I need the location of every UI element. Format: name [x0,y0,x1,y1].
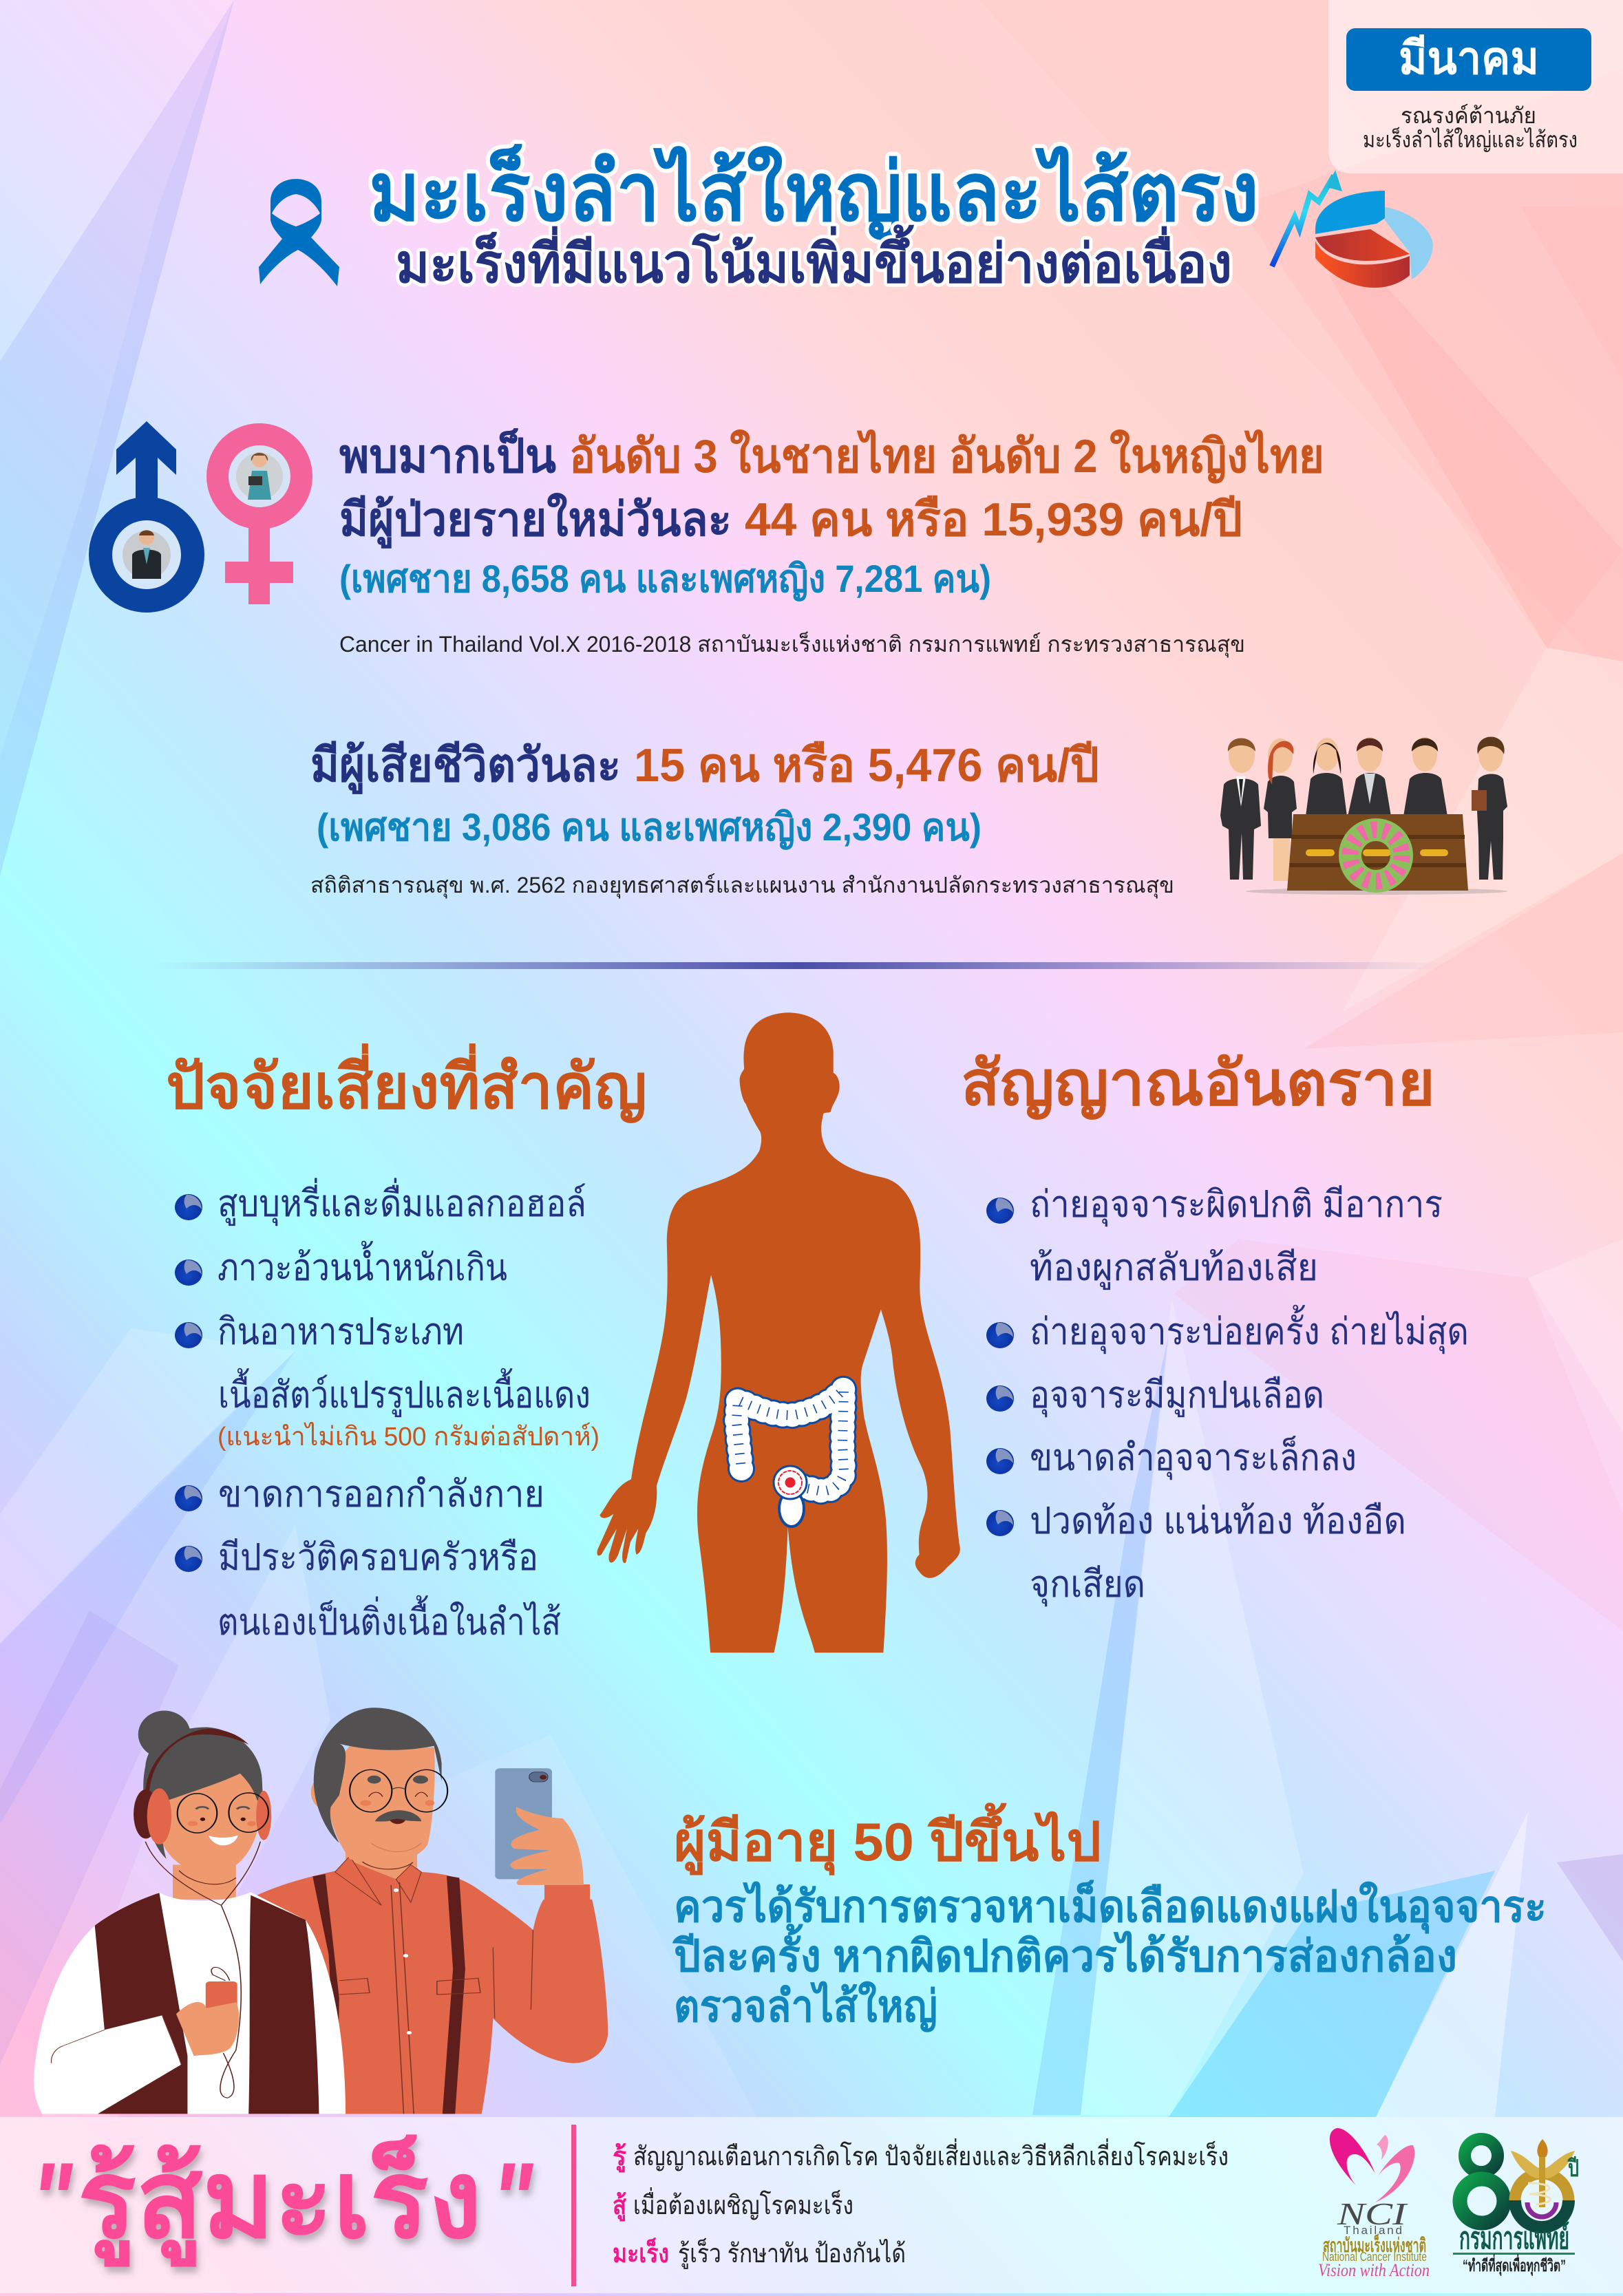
risk factor bullet list: ตนเองเป็นติ่งเนื้อในลำไส้ [218,1595,561,1643]
heading: warning signs: สัญญาณอันตราย [961,1050,1435,1120]
logo: department of medical services 80 years [1453,2139,1579,2277]
warning signs bullet list [986,1184,1469,1607]
logo: national cancer institute: National Cancer Institute [1322,2250,1427,2264]
text block: mortality statistics: สถิติสาธารณสุข พ.ศ. 2562 กองยุทธศาสตร์และแผนงาน สำนักงานปลัดกระทรวงสาธารณสุข [310,873,1174,899]
text block: incidence statistics: มีผู้ป่วยรายใหม่วันละ [339,492,732,549]
warning signs bullet list: ขนาดลำอุจจาระเล็กลง [1030,1436,1357,1480]
slogan explanation: สัญญาณเตือนการเกิดโรค ปัจจัยเสี่ยงและวิธีหลีกเลี่ยงโรคมะเร็ง [633,2138,1229,2171]
icon: mourners around coffin [1220,736,1507,895]
risk factor bullet list: ขาดการออกกำลังกาย [218,1474,544,1515]
risk factor bullet list: (แนะนำไม่เกิน 500 กรัมต่อสัปดาห์) [218,1422,600,1452]
title [369,143,1259,294]
risk factor bullet list: สูบบุหรี่และดื่มแอลกอฮอล์ [218,1178,586,1226]
woman [34,1710,346,2114]
colon [736,1389,844,1527]
text block: mortality statistics: มีผู้เสียชีวิตวันละ [310,739,621,795]
icon: female symbol [206,423,312,604]
text block: mortality statistics: (เพศชาย 3,086 คน และเพศหญิง 2,390 คน) [317,805,982,850]
text block: incidence statistics: 44 คน หรือ 15,939 คน/ปี [745,493,1242,546]
text block: screening advice for age 50+: ปีละครั้ง หากผิดปกติควรได้รับการส่องกล้อง [672,1924,1457,1981]
text block: mortality statistics [310,739,1174,899]
title: มะเร็งลำไส้ใหญ่และไส้ตรง [369,143,1259,240]
warning signs bullet list: ถ่ายอุจจาระผิดปกติ มีอาการ [1030,1184,1443,1227]
risk factor bullet list: เนื้อสัตว์แปรรูปและเนื้อแดง [218,1368,591,1417]
heading: risk factors: ปัจจัยเสี่ยงที่สำคัญ [166,1043,647,1124]
body silhouette with colon [597,1012,960,1652]
text block: screening advice for age 50+: ตรวจลำไส้ใหญ่ [674,1981,937,2032]
text block: mortality statistics: 15 คน หรือ 5,476 คน/ปี [634,739,1099,791]
campaign caption: มะเร็งลำไส้ใหญ่และไส้ตรง [1363,127,1578,152]
slogan explanation: สู้ [613,2191,627,2222]
campaign caption: รณรงค์ต้านภัย [1401,103,1536,128]
text block: screening advice for age 50+: ควรได้รับการตรวจหาเม็ดเลือดแดงแฝงในอุจจาระ [674,1880,1547,1934]
logo: department of medical services 80 years: ปี [1567,2156,1579,2182]
icon: rising arrow and pie chart [1272,170,1433,288]
panel: warning signs [961,1050,1469,1607]
logo: national cancer institute: Vision with Action [1318,2260,1430,2280]
subtitle: มะเร็งที่มีแนวโน้มเพิ่มขึ้นอย่างต่อเนื่อง [396,224,1232,294]
risk factor bullet list [175,1178,600,1643]
silhouette [597,1012,960,1652]
campaign slogan: รู้สู้มะเร็ง [78,2134,482,2267]
text block: incidence statistics: (เพศชาย 8,658 คน และเพศหญิง 7,281 คน) [339,557,991,602]
slogan explanation: รู้ [613,2143,627,2173]
month badge [1346,28,1591,91]
logo: national cancer institute: สถาบันมะเร็งแห่งชาติ [1323,2233,1426,2256]
text block: screening advice for age 50+: ผู้มีอายุ 50 ปีขึ้นไป [674,1803,1101,1875]
risk factor bullet list: กินอาหารประเภท [218,1311,464,1352]
icon: male symbol [89,421,204,613]
illustration: elderly couple [34,1708,608,2114]
divider [151,962,1445,969]
icon: blue ribbon [259,179,339,286]
warning signs bullet list: ปวดท้อง แน่นท้อง ท้องอืด [1030,1500,1406,1542]
slogan explanation: รู้เร็ว รักษาทัน ป้องกันได้ [678,2237,906,2269]
risk factor bullet list: มีประวัติครอบครัวหรือ [218,1537,538,1578]
warning signs bullet list: ท้องผูกสลับท้องเสีย [1030,1247,1318,1290]
text block: incidence statistics: พบมากเป็น [339,428,556,482]
slogan explanation: มะเร็ง [613,2237,669,2268]
slogan explanation [613,2138,1229,2269]
campaign slogan: " [31,2140,74,2260]
man [257,1708,608,2114]
warning signs bullet list: ถ่ายอุจจาระบ่อยครั้ง ถ่ายไม่สุด [1030,1305,1469,1354]
campaign caption [1363,103,1578,152]
campaign slogan: " [491,2140,534,2260]
logo: national cancer institute: Thailand [1344,2224,1402,2237]
logo: department of medical services 80 years: “ทำดีที่สุดเพื่อทุกชีวิต” [1463,2253,1566,2277]
text block: screening advice for age 50+ [672,1803,1547,2032]
slogan explanation: เมื่อต้องเผชิญโรคมะเร็ง [633,2187,853,2220]
text block: incidence statistics: Cancer in Thailand Vol.X 2016-2018 สถาบันมะเร็งแห่งชาติ กรมการแพทย์ กระทรวงสาธารณสุข [339,631,1245,658]
logo: national cancer institute [1318,2128,1430,2280]
month badge: มีนาคม [1399,32,1539,83]
warning signs bullet list: อุจจาระมีมูกปนเลือด [1030,1374,1324,1418]
risk factor bullet list: ภาวะอ้วนน้ำหนักเกิน [218,1241,507,1288]
corner panel: campaign month [1328,0,1623,173]
warning signs bullet list: จุกเสียด [1030,1564,1145,1607]
logo: national cancer institute: NCI [1337,2196,1408,2231]
footer band [0,2117,1623,2293]
text block: incidence statistics [339,428,1324,658]
panel: risk factors [166,1043,647,1643]
text block: incidence statistics: อันดับ 3 ในชายไทย อันดับ 2 ในหญิงไทย [569,429,1324,484]
